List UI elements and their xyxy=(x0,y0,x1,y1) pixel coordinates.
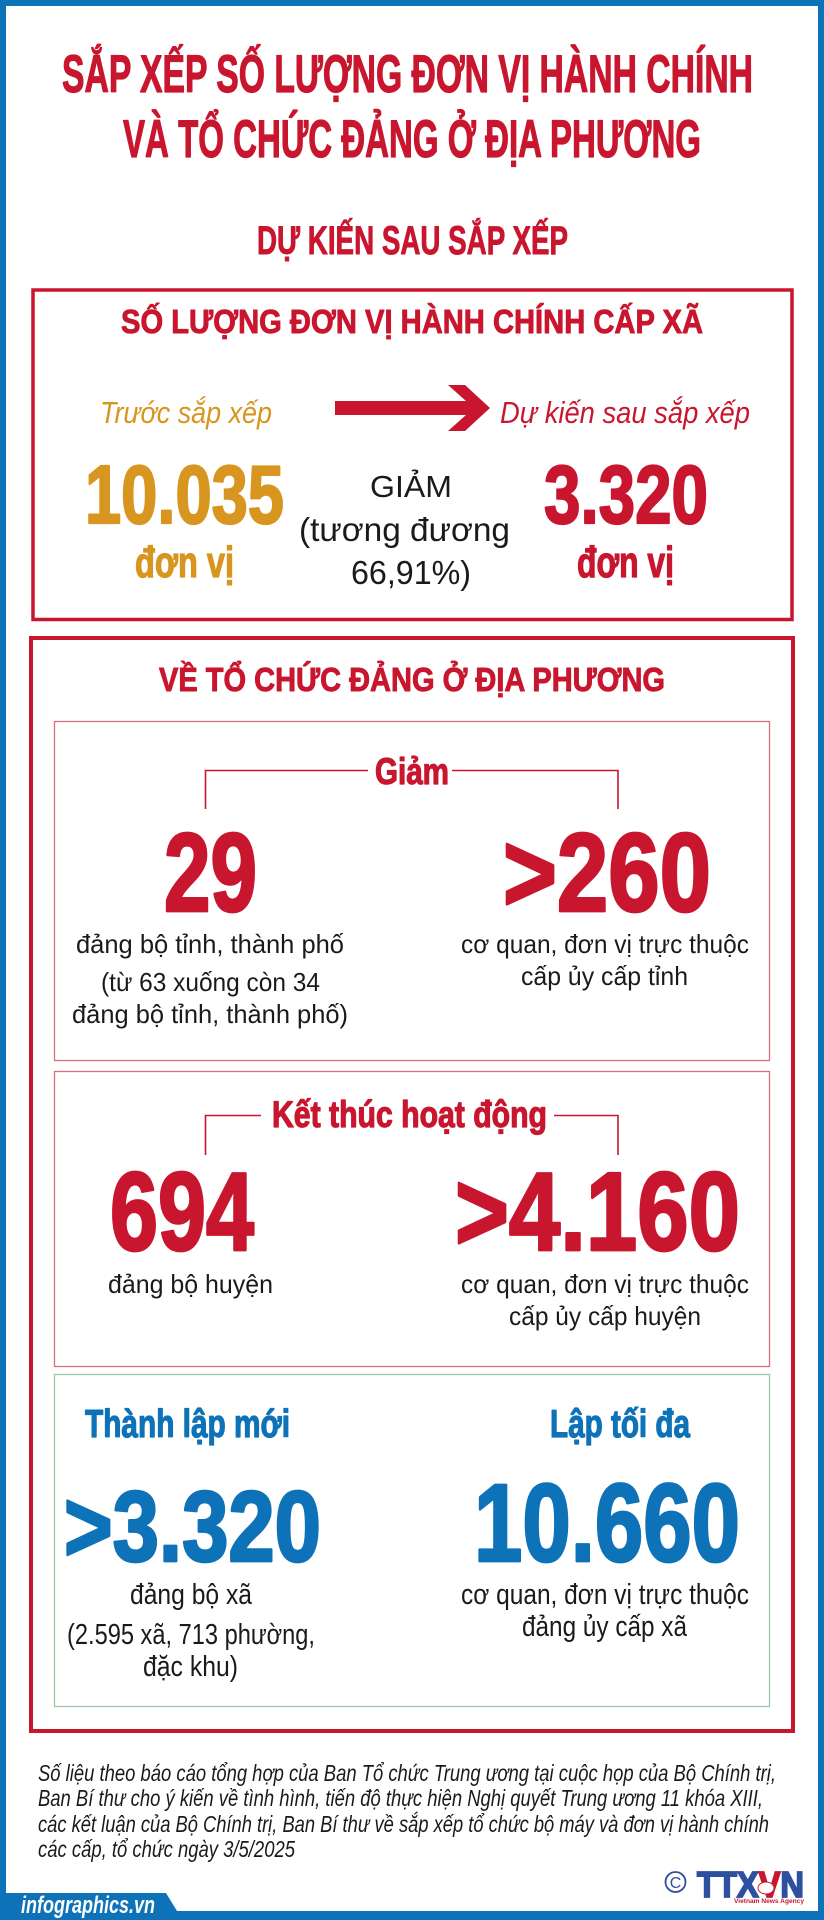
heading: reduced: Giảm xyxy=(375,751,449,792)
site label: infographics.vn xyxy=(21,1892,155,1919)
panel heading: VỀ TỔ CHỨC ĐẢNG Ở ĐỊA PHƯƠNG xyxy=(159,661,665,698)
panel border xyxy=(33,290,792,620)
stat: 10660: 10.660 xyxy=(474,1462,740,1585)
bracket xyxy=(206,770,618,809)
wordmark: TTXVN xyxy=(697,1864,804,1905)
stat: 10660: đảng ủy cấp xã xyxy=(522,1611,688,1643)
stat: 29: đảng bộ tỉnh, thành phố xyxy=(76,929,344,959)
stat: before: 10.035 xyxy=(85,448,284,541)
stat: 29 xyxy=(72,811,348,1029)
subtitle: DỰ KIẾN SAU SẮP XẾP xyxy=(257,217,568,263)
sub-panel: newly established xyxy=(54,1374,770,1706)
arrow xyxy=(335,385,490,431)
sub-panel: reduced xyxy=(54,722,770,1060)
label: after: Dự kiến sau sắp xếp xyxy=(500,395,750,430)
icon: globe xyxy=(758,1882,774,1894)
stat: 694: đảng bộ huyện xyxy=(108,1269,273,1299)
stat: 4160 xyxy=(455,1150,749,1331)
stat: 3320: Thành lập mới xyxy=(85,1403,290,1446)
stat: reduction: GIẢM xyxy=(370,469,452,504)
sub-panel: ceased operation xyxy=(54,1072,770,1366)
stat: before: đơn vị xyxy=(135,538,234,587)
title xyxy=(62,43,753,169)
stat: reduction: 66,91%) xyxy=(351,554,471,591)
wordmark tagline: Vietnam News Agency xyxy=(734,1898,804,1905)
stat: 260: cơ quan, đơn vị trực thuộc xyxy=(461,929,749,959)
stat: 260: >260 xyxy=(503,811,711,935)
stat: after: đơn vị xyxy=(577,538,674,587)
panel: commune-level administrative units xyxy=(33,290,792,620)
stat: 694: 694 xyxy=(110,1150,254,1274)
stat: 29: đảng bộ tỉnh, thành phố) xyxy=(72,999,348,1029)
panel heading: SỐ LƯỢNG ĐƠN VỊ HÀNH CHÍNH CẤP XÃ xyxy=(121,302,703,340)
icon: copyright: C xyxy=(670,1875,681,1892)
stat: 4160: cấp ủy cấp huyện xyxy=(509,1301,701,1331)
stat: 4160: >4.160 xyxy=(455,1150,740,1274)
label: before: Trước sắp xếp xyxy=(100,395,272,430)
panel border xyxy=(31,638,793,1731)
stat: before xyxy=(85,448,284,587)
stat: 29: (từ 63 xuống còn 34 xyxy=(101,967,320,997)
logo: TTXVN xyxy=(666,1864,804,1905)
stat: 3320: đảng bộ xã xyxy=(130,1579,253,1611)
stat: 10660: Lập tối đa xyxy=(550,1403,690,1446)
stat: 4160: cơ quan, đơn vị trực thuộc xyxy=(461,1269,749,1299)
stat: after: 3.320 xyxy=(544,448,708,541)
stat: 3320 xyxy=(64,1403,321,1683)
panel: local party organisation xyxy=(31,638,793,1731)
stat: 29: 29 xyxy=(164,811,257,935)
stat: 260: cấp ủy cấp tỉnh xyxy=(521,961,688,991)
heading: ceased operation: Kết thúc hoạt động xyxy=(272,1094,547,1135)
stat: reduction xyxy=(299,469,510,591)
stat: 260 xyxy=(461,811,749,991)
stat: 3320: (2.595 xã, 713 phường, xyxy=(67,1619,315,1651)
bracket xyxy=(206,1116,618,1155)
source note: các cấp, tổ chức ngày 3/5/2025 xyxy=(38,1836,295,1862)
source note xyxy=(38,1760,776,1862)
stat: 10660: cơ quan, đơn vị trực thuộc xyxy=(461,1579,749,1611)
stat: 10660 xyxy=(461,1403,749,1643)
stat: after xyxy=(544,448,708,587)
stat: 3320: >3.320 xyxy=(64,1471,321,1583)
stat: reduction: (tương đương xyxy=(299,511,510,548)
stat: 3320: đặc khu) xyxy=(143,1651,238,1683)
